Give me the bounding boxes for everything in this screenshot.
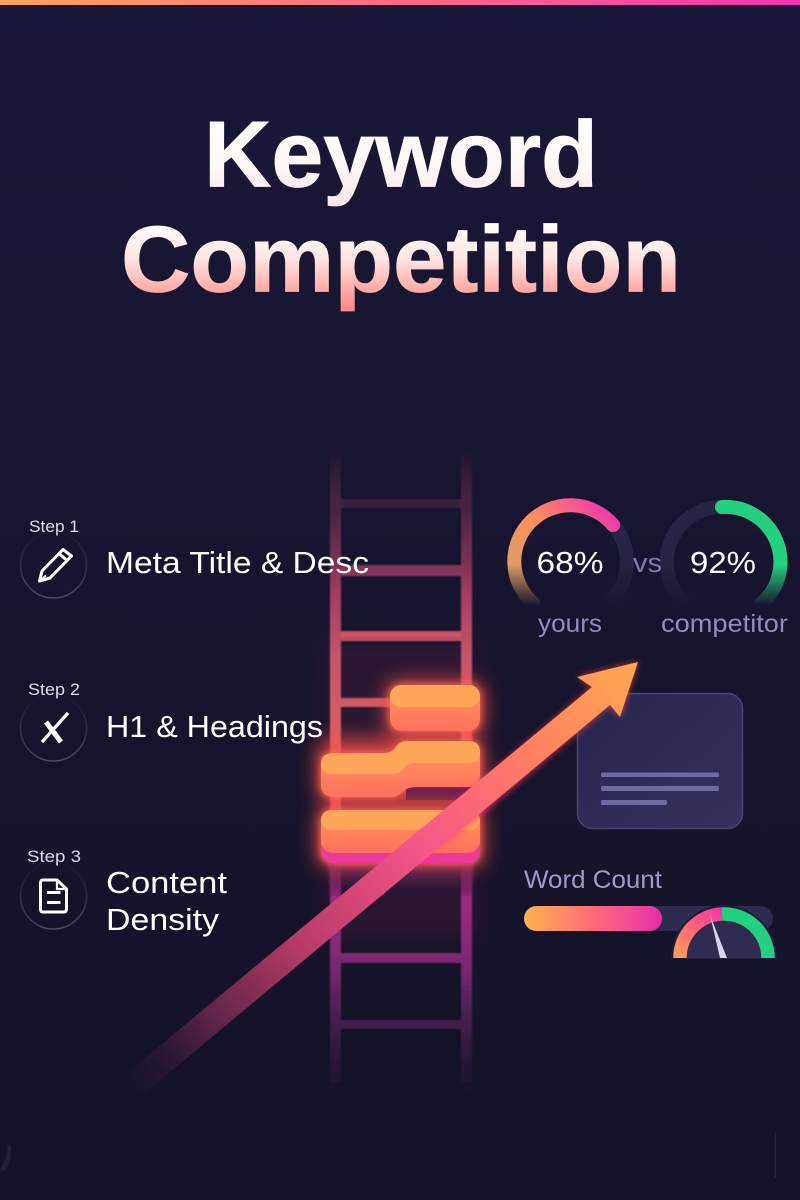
icon: X mark <box>20 695 86 761</box>
ladder <box>325 455 477 1095</box>
block glow <box>317 681 484 867</box>
stacked blocks <box>317 681 484 867</box>
step 2 <box>20 680 323 761</box>
block 2 <box>321 741 480 800</box>
vs label: vs <box>633 548 662 578</box>
icon: pencil <box>20 532 86 598</box>
title: Competition <box>121 206 681 312</box>
word count <box>524 870 777 958</box>
bottom corner artifacts <box>2 1132 776 1178</box>
icon: document <box>20 863 86 929</box>
info card <box>578 694 742 828</box>
top gradient bar <box>0 0 800 35</box>
progress bar <box>524 906 773 931</box>
competitor label: competitor <box>661 610 788 638</box>
block 3 <box>321 810 480 863</box>
step 1 label: Step 1 <box>29 517 79 536</box>
competitor value: 92% <box>690 545 756 580</box>
step 3 title <box>106 865 227 937</box>
donut comparison <box>514 505 788 638</box>
block 1 <box>390 685 480 731</box>
step 1 title: Meta Title & Desc <box>106 545 369 580</box>
donut: yours <box>514 505 627 603</box>
yours label: yours <box>538 610 602 638</box>
gauge <box>671 905 777 958</box>
step 2 label: Step 2 <box>28 680 80 699</box>
step 2 title: H1 & Headings <box>106 709 323 744</box>
title <box>121 102 681 312</box>
title: Keyword <box>204 102 598 206</box>
rising arrow <box>104 662 638 1092</box>
step 3 label: Step 3 <box>27 847 81 866</box>
step 3 title: Content <box>106 865 227 900</box>
step 3 <box>20 847 227 937</box>
yours value: 68% <box>536 545 604 580</box>
step 1 <box>20 517 369 598</box>
word count label: Word Count <box>524 866 662 894</box>
donut: competitor <box>667 507 780 603</box>
step 3 title: Density <box>106 902 220 937</box>
